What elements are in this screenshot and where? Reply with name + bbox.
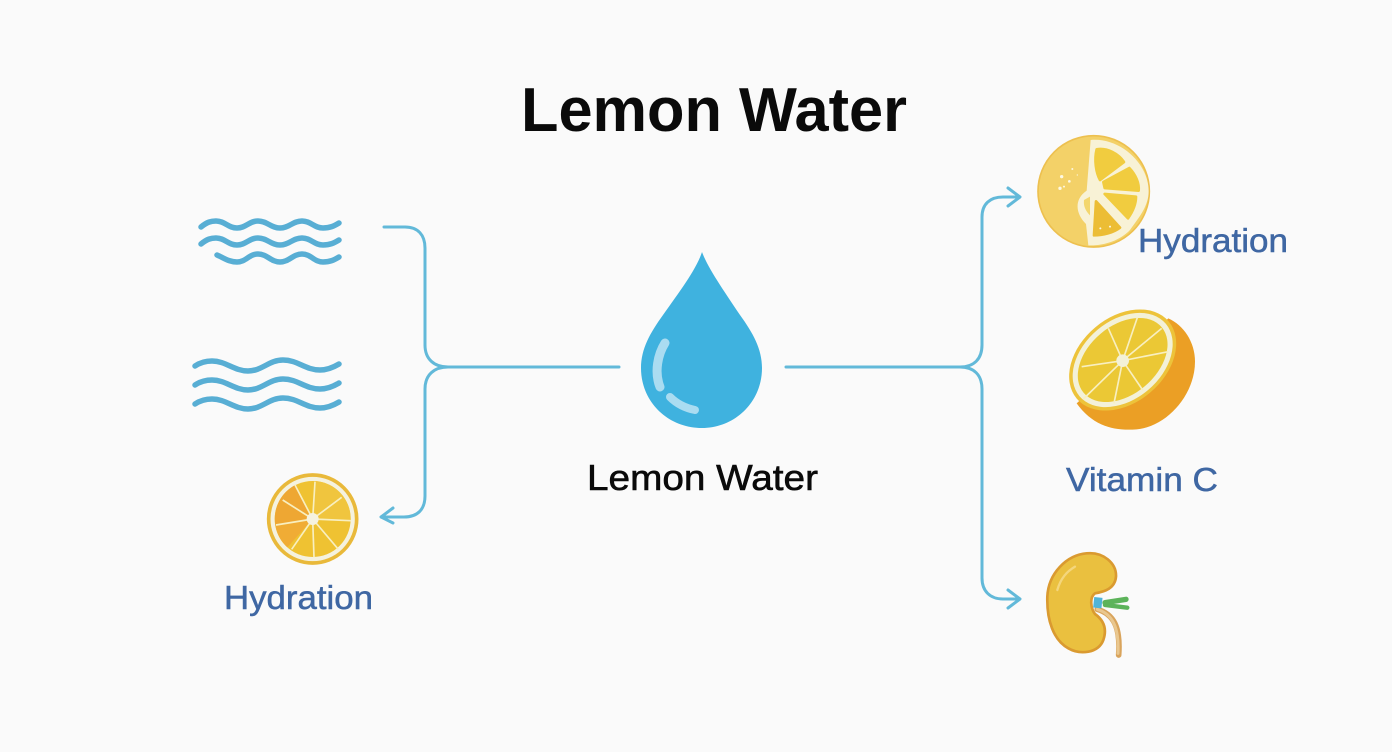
icon: water drop — [641, 252, 762, 428]
icon: kidney — [1047, 553, 1127, 655]
left connector with arrow — [381, 227, 619, 523]
label: hydration, top right: Hydration — [1138, 222, 1288, 259]
icon: top water waves — [201, 221, 339, 262]
icon: citrus slice, left — [269, 475, 357, 563]
title: Lemon Water — [521, 76, 907, 145]
label: vitamin C: Vitamin C — [1066, 461, 1218, 498]
icon: middle water waves — [195, 360, 339, 409]
label: hydration, left: Hydration — [224, 579, 373, 616]
icon: lemon slice, top right — [1038, 136, 1149, 247]
right connector with arrows — [786, 188, 1020, 608]
icon: halved lemon — [1049, 289, 1196, 431]
center label: Lemon Water — [587, 457, 818, 498]
